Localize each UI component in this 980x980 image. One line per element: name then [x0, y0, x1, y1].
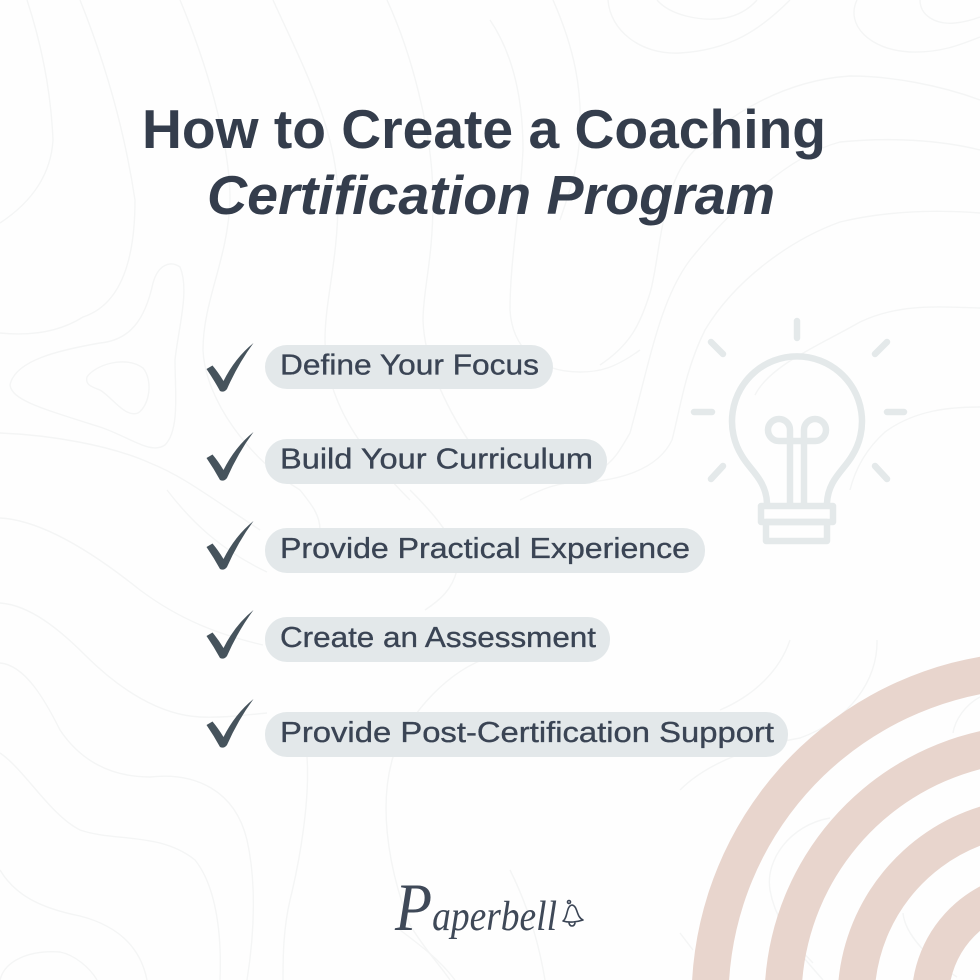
- item: Build Your Curriculum: Build Your Curriculum: [280, 444, 593, 476]
- title: [142, 98, 826, 226]
- item: Create an Assessment: Create an Assessment: [280, 622, 596, 654]
- item: Provide Practical Experience: Provide Practical Experience: [280, 533, 690, 565]
- item: Provide Practical Experience: [206, 521, 705, 573]
- icon: light bulb: [694, 321, 904, 541]
- item: Provide Post-Certification Support: [206, 699, 788, 757]
- decorative concentric arcs: [692, 657, 980, 980]
- title: Certification Program: [207, 164, 775, 226]
- checklist: [206, 343, 788, 757]
- item: Create an Assessment: [206, 610, 610, 662]
- title: How to Create a Coaching: [142, 98, 826, 160]
- item: Build Your Curriculum: [206, 432, 607, 484]
- logo: Paperbell: Paperbell: [394, 869, 557, 945]
- item: Define Your Focus: Define Your Focus: [280, 350, 539, 382]
- item: Define Your Focus: [206, 343, 553, 392]
- item: Provide Post-Certification Support: Provide Post-Certification Support: [280, 717, 774, 749]
- icon: bell: [563, 900, 583, 926]
